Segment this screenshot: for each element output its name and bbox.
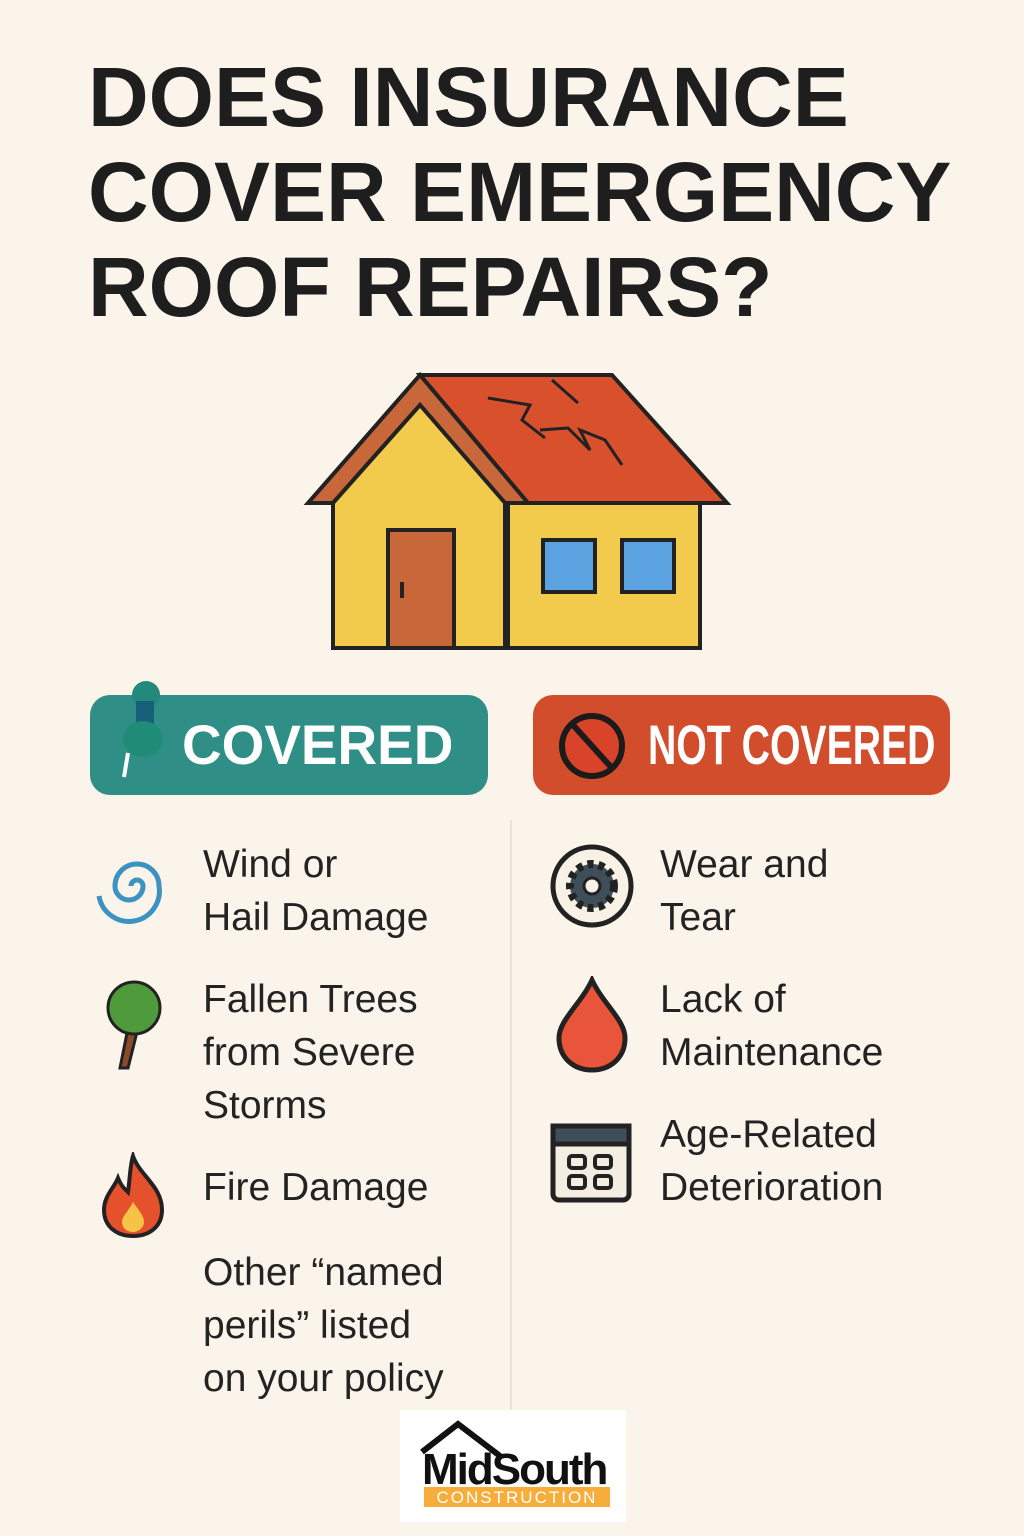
logo: MidSouth: [422, 1445, 607, 1494]
pill: not covered: NOT COVERED: [648, 713, 935, 776]
item: lack of maintenance: [660, 978, 883, 1074]
item: fallen trees: [203, 978, 418, 1127]
item: wind or hail: [203, 843, 428, 939]
logo: [400, 1410, 626, 1522]
item: wind or hail: Hail Damage: [203, 896, 428, 939]
title: COVER EMERGENCY: [88, 145, 951, 239]
item: lack of maintenance: Lack of: [660, 978, 786, 1021]
item: other named perils: [203, 1251, 444, 1400]
icon: gear: [550, 844, 634, 928]
pill: covered: [90, 695, 488, 795]
item: other named perils: on your policy: [203, 1357, 444, 1400]
item: other named perils: perils” listed: [203, 1304, 411, 1347]
item: wind or hail: Wind or: [203, 843, 337, 886]
title: DOES INSURANCE: [88, 50, 849, 144]
item: fallen trees: Fallen Trees: [203, 978, 418, 1021]
item: wear and tear: Tear: [660, 896, 736, 939]
item: age-related: Deterioration: [660, 1166, 883, 1209]
logo: CONSTRUCTION: [437, 1488, 597, 1507]
item: wear and tear: Wear and: [660, 843, 828, 886]
item: other named perils: Other “named: [203, 1251, 444, 1294]
icon: pushpin: [122, 681, 163, 778]
item: fallen trees: from Severe: [203, 1031, 415, 1074]
icon: calendar: [550, 1124, 632, 1202]
item: wear and tear: [660, 843, 828, 939]
icon: tree: [106, 980, 162, 1070]
icon: prohibited: [559, 713, 625, 779]
icon: fire: [102, 1152, 164, 1238]
item: fire damage: Fire Damage: [203, 1166, 428, 1209]
pill: not covered: [533, 695, 950, 795]
title: [88, 50, 951, 334]
icon: house: [304, 372, 732, 650]
title: ROOF REPAIRS?: [88, 240, 772, 334]
item: fallen trees: Storms: [203, 1084, 327, 1127]
item: age-related: [660, 1113, 883, 1209]
item: lack of maintenance: Maintenance: [660, 1031, 883, 1074]
icon: wind spiral: [96, 862, 162, 924]
icon: drop: [556, 976, 628, 1072]
item: age-related: Age-Related: [660, 1113, 877, 1156]
pill: covered: COVERED: [182, 713, 453, 776]
